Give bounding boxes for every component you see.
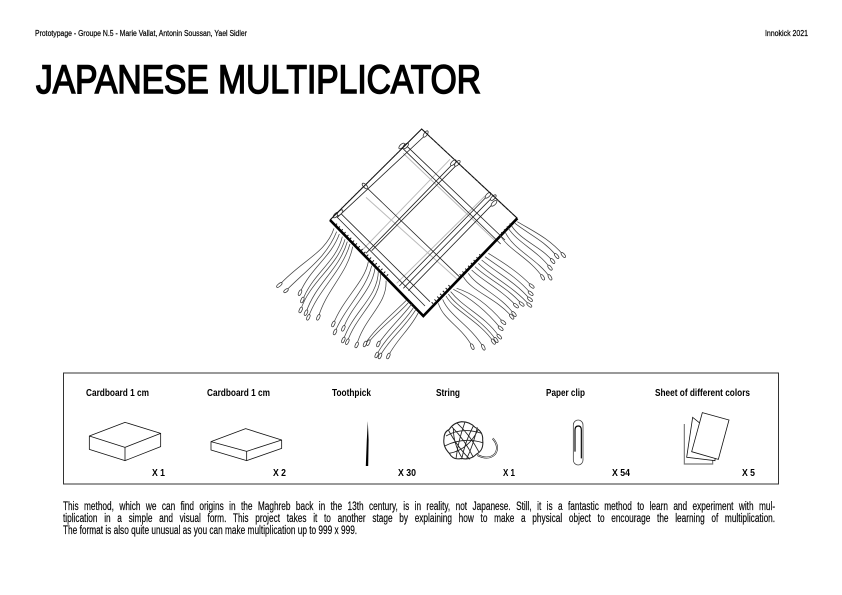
material: paper clip: Paper clip <box>546 388 585 399</box>
material: paper clip: X 54 <box>612 468 630 479</box>
grey grid lines <box>362 153 495 283</box>
black grid lines <box>336 134 505 306</box>
text block: project description: This method, which we can find origins in the Maghreb back in the 13th century, is in reality, not Japanese. Still, it is a fantastic method to learn and experiment with mul- <box>63 501 775 513</box>
header: event and year: Innokick 2021 <box>765 29 808 38</box>
illustration: multiplicator board with strings <box>276 129 566 359</box>
panel: materials list <box>64 373 778 484</box>
material: sheets of different colors: X 5 <box>742 468 755 479</box>
strings on the left <box>279 228 418 356</box>
header: project credits: Prototypage - Groupe N.5 - Marie Vallat, Antonin Soussan, Yael Sidler <box>35 29 247 38</box>
string-end clips <box>276 252 566 359</box>
material: sheets of different colors <box>655 388 755 479</box>
text block: project description: The format is also quite unusual as you can make multiplication up to 999 x 999. <box>63 525 357 537</box>
material: string <box>436 388 515 479</box>
title: JAPANESE MULTIPLICATOR <box>36 58 481 102</box>
board outline <box>330 129 517 220</box>
material: cardboard 1 cm, one piece: Cardboard 1 cm <box>86 388 149 399</box>
material: cardboard 1 cm, one piece <box>86 388 165 479</box>
toothpick ticks along the lower edges <box>336 222 513 303</box>
text block: project description: tiplication in a simple and visual form. This project takes it to another stage by explaining how to make a physical object to encourage the learning of multiplication. <box>63 513 775 525</box>
material: cardboard 1 cm, two pieces: Cardboard 1 cm <box>207 388 270 399</box>
panel border <box>64 373 778 484</box>
material: cardboard 1 cm, two pieces <box>207 388 286 479</box>
strings on the right <box>438 222 563 347</box>
material: string: X 1 <box>503 468 515 479</box>
material: cardboard 1 cm, one piece: X 1 <box>152 468 165 479</box>
material: toothpick <box>332 388 416 479</box>
material: toothpick: Toothpick <box>332 388 371 399</box>
material: string: String <box>436 388 460 399</box>
text block: project description <box>63 501 775 537</box>
paper clips on the upper edges <box>332 130 498 219</box>
material: cardboard 1 cm, two pieces: X 2 <box>273 468 286 479</box>
material: sheets of different colors: Sheet of different colors <box>655 388 750 399</box>
material: toothpick: X 30 <box>398 468 416 479</box>
material: paper clip <box>546 388 630 479</box>
